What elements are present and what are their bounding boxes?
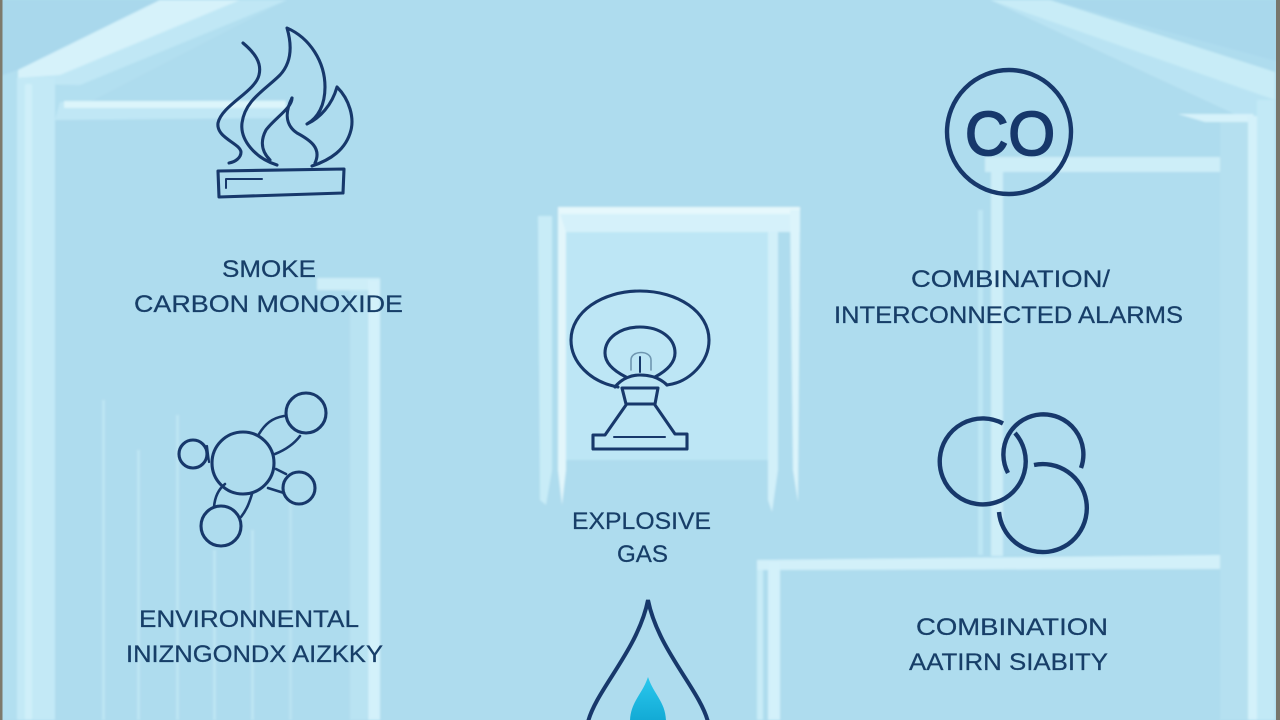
label: combination interconnected alarms: COMBINATION/: [911, 266, 1110, 293]
right house: [990, 0, 1275, 720]
label: combination alarm safety: AATIRN SIABITY: [909, 649, 1108, 676]
label: combination interconnected alarms: INTERCONNECTED ALARMS: [834, 302, 1183, 329]
label: smoke carbon monoxide: CARBON MONOXIDE: [134, 291, 403, 318]
icon: CO circle: [947, 70, 1071, 194]
label: combination alarm safety: [909, 614, 1108, 676]
label: environmental: INIZNGONDX AIZKKY: [126, 641, 383, 668]
icon: CO circle: CO: [965, 100, 1055, 169]
window frames: [985, 157, 1220, 172]
label: environmental: [126, 606, 383, 668]
icon: interlocking rings: [940, 414, 1087, 552]
icon: gas burner: [571, 291, 709, 449]
label: explosive gas: [572, 508, 711, 568]
label: combination interconnected alarms: [834, 266, 1183, 329]
label: smoke carbon monoxide: [134, 256, 403, 318]
left window: [317, 278, 380, 290]
icon: gas droplet: [588, 600, 708, 720]
label: combination alarm safety: COMBINATION: [916, 614, 1108, 641]
icon: flame with smoke: [218, 28, 352, 197]
label: smoke carbon monoxide: SMOKE: [222, 256, 316, 283]
label: environmental: ENVIRONNENTAL: [139, 606, 359, 633]
centre frame: [566, 232, 768, 460]
label: explosive gas: GAS: [617, 541, 668, 568]
label: explosive gas: EXPLOSIVE: [572, 508, 711, 535]
icon: molecule: [179, 393, 326, 546]
